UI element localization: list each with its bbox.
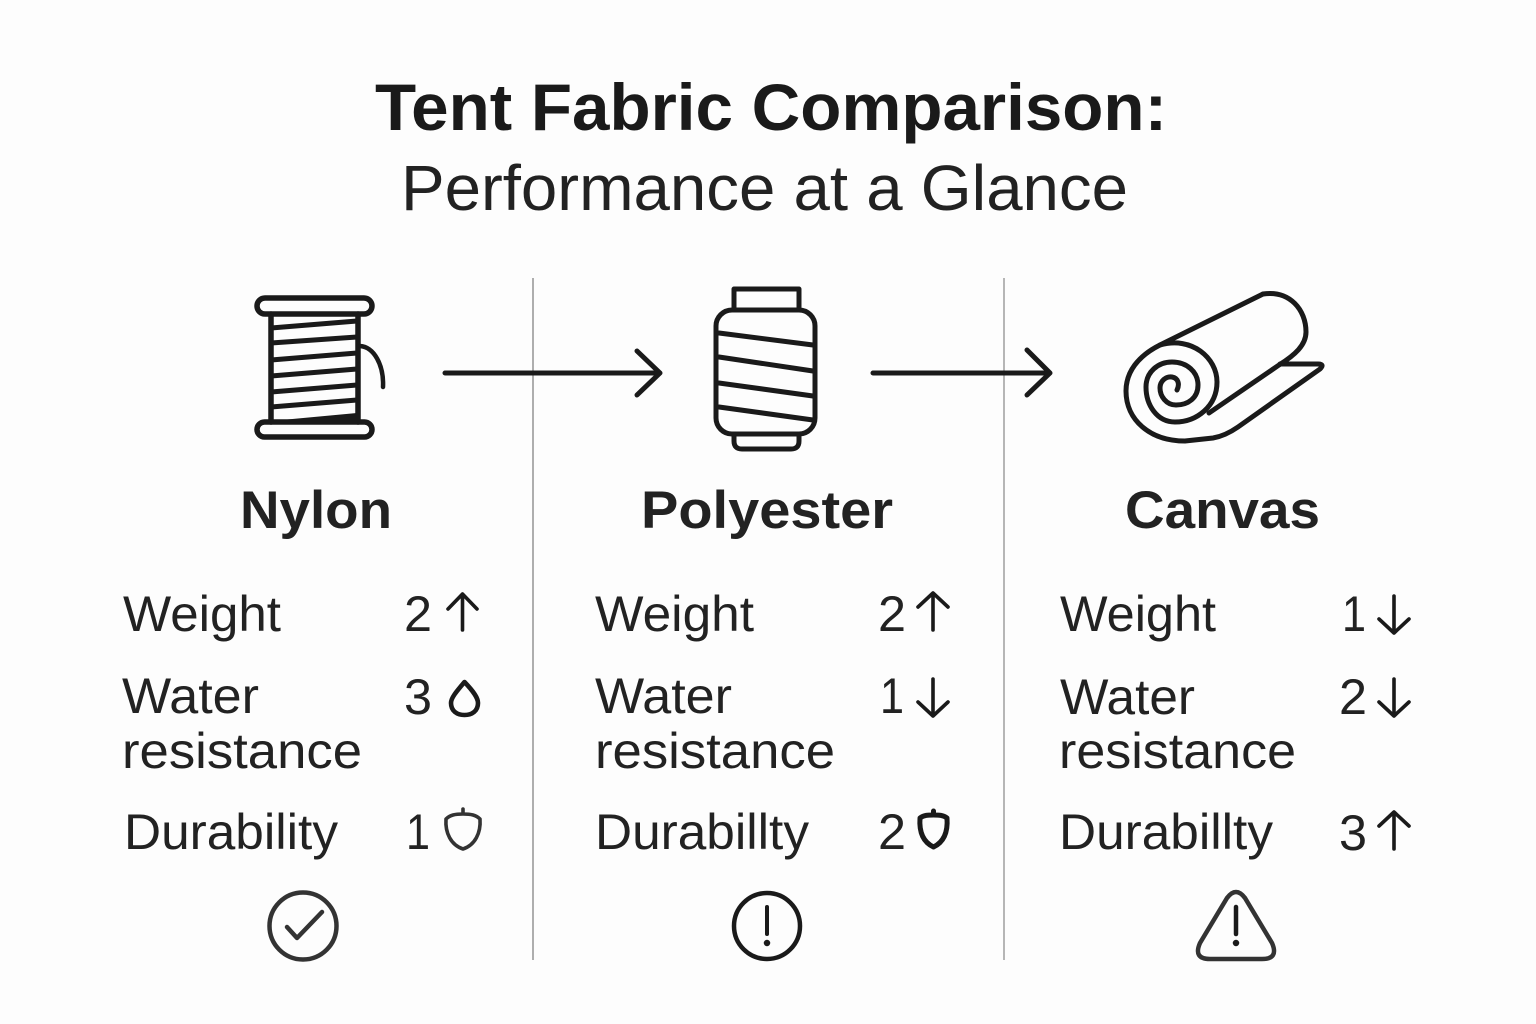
row: weight: 2	[404, 586, 432, 642]
row: weight: Weight	[1060, 586, 1216, 642]
row: water resistance: Water	[595, 668, 732, 724]
row: water resistance	[1059, 669, 1409, 779]
row: weight: 2	[878, 586, 906, 642]
row: water resistance: resistance	[122, 723, 362, 779]
row: durability: Durabillty	[595, 804, 809, 860]
heading: nylon: Nylon	[240, 481, 392, 540]
title: Performance at a Glance	[401, 152, 1128, 224]
icon: thread spool	[257, 298, 383, 437]
row: water resistance: resistance	[595, 723, 835, 779]
row: weight	[123, 586, 477, 642]
heading: canvas: Canvas	[1125, 481, 1320, 540]
row: durability: 2	[878, 804, 906, 860]
row: durability: Durability	[124, 804, 338, 860]
heading: polyester: Polyester	[641, 481, 893, 540]
panel: polyester	[595, 289, 948, 959]
row: water resistance: 1	[880, 668, 904, 724]
row: durability: 3	[1339, 805, 1367, 861]
row: durability	[124, 804, 480, 860]
row: water resistance: 2	[1339, 669, 1367, 725]
row: weight: Weight	[123, 586, 281, 642]
row: weight: Weight	[595, 586, 754, 642]
row: weight	[1060, 586, 1409, 642]
row: water resistance: Water	[1060, 669, 1195, 725]
row: durability: Durabillty	[1059, 804, 1273, 860]
row: durability: 1	[406, 804, 430, 860]
row: water resistance: resistance	[1059, 723, 1296, 779]
icon: warning triangle	[1198, 892, 1274, 959]
icon: exclamation circle	[734, 893, 800, 959]
icon: fabric roll	[1126, 293, 1322, 441]
row: durability	[595, 804, 947, 860]
row: water resistance: 3	[404, 669, 432, 725]
panel: canvas	[1059, 293, 1409, 959]
row: durability	[1059, 804, 1409, 861]
panel: nylon	[122, 298, 480, 960]
row: water resistance	[122, 668, 478, 779]
icon: check circle	[270, 892, 336, 960]
row: weight: 1	[1342, 586, 1366, 642]
arrow: nylon to polyester	[445, 351, 660, 395]
arrow: polyester to canvas	[873, 350, 1050, 395]
row: water resistance: Water	[122, 668, 259, 724]
icon: polyester spool	[716, 289, 815, 449]
title: Tent Fabric Comparison:	[375, 70, 1167, 144]
row: water resistance	[595, 668, 948, 779]
title	[375, 70, 1167, 224]
row: weight	[595, 586, 948, 642]
